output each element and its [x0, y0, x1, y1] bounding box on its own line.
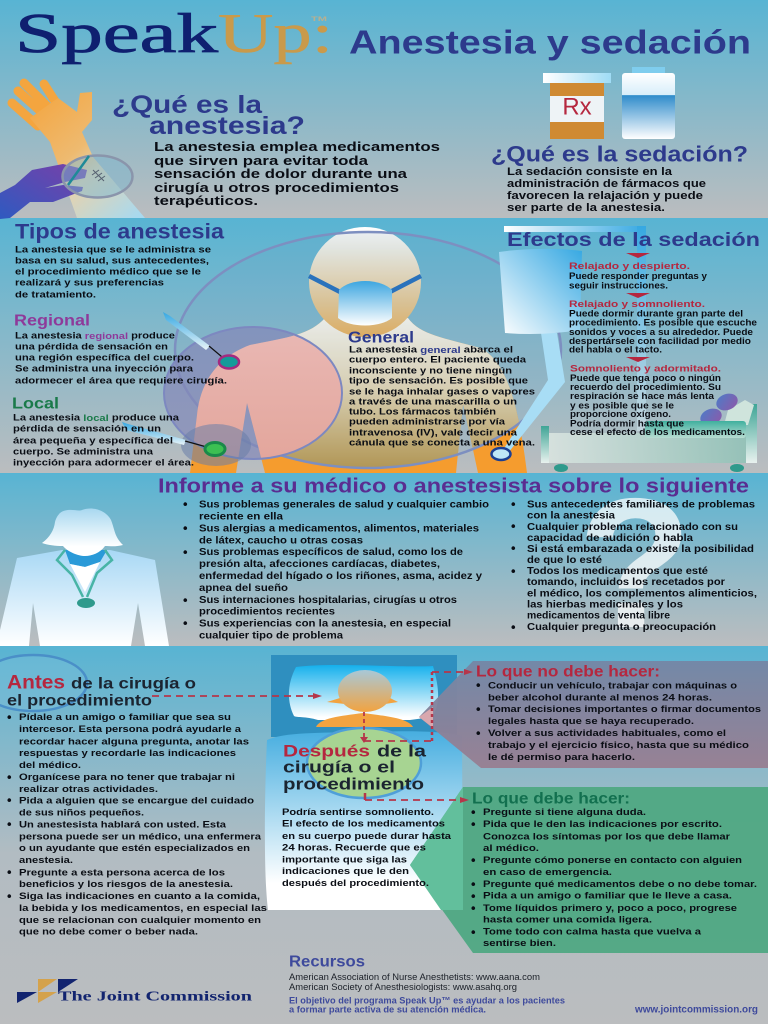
heading: after: de la	[377, 742, 427, 760]
heading: tell your doctor: Informe a su médico o anestesista sobre lo siguiente	[158, 474, 749, 498]
list: what not to do: trabajo y el ejercicio físico, hasta que su médico	[488, 740, 749, 751]
icon: question mark: ?	[578, 461, 692, 667]
heading: effects: Efectos de la sedación	[507, 229, 760, 251]
list: before: Pregunte a esta persona acerca de los	[19, 868, 225, 878]
list: what to do: •	[471, 900, 476, 916]
logo: The Joint Commission: The Joint Commission	[58, 990, 252, 1004]
list: what not to do: •	[476, 726, 481, 740]
list: right column	[511, 496, 757, 634]
list: what to do: Pida que le den las indicaciones por escrito.	[483, 819, 722, 830]
list: before: persona puede ser un médico, una enfermera	[19, 832, 262, 842]
list: what to do: sentirse bien.	[483, 938, 556, 949]
text: sleepy and drowsy	[570, 364, 745, 437]
list: what not to do: beber alcohol durante al menos 24 horas.	[488, 692, 712, 704]
list: what not to do: •	[476, 678, 481, 692]
heading: what to do: Lo que debe hacer:	[472, 790, 630, 808]
arrows: dashed connectors	[152, 669, 473, 803]
text: regional: una pérdida de sensación en	[15, 342, 168, 352]
text: program goal	[289, 996, 565, 1016]
website: www.jointcommission.org	[634, 1004, 758, 1016]
panel: types of anesthesia	[12, 220, 535, 468]
text: after: 24 horas. Recuerde que es	[282, 842, 426, 854]
list: left column: Sus problemas específicos de salud, como los de	[199, 547, 463, 558]
heading: types: Tipos de anestesia	[15, 220, 224, 244]
panel: what not to do	[419, 661, 768, 768]
list: right column: de que lo esté	[527, 555, 602, 566]
text: regional: Se administra una inyección para	[15, 364, 194, 374]
list: what not to do: Conducir un vehículo, trabajar con máquinas o	[488, 680, 737, 692]
list: before: realizar otras actividades.	[19, 784, 158, 795]
text: relaxed and sleepy: Puede dormir durante gran parte del	[569, 308, 743, 318]
list: what to do: •	[471, 924, 476, 940]
list: before	[7, 710, 267, 938]
list: left column: procedimientos recientes	[199, 606, 335, 618]
text: regional: adormecer el área que requiere cirugía.	[15, 376, 227, 386]
text: relaxed and awake: seguir instrucciones.	[569, 280, 668, 290]
text: anesthesia definition: que sirven para evitar toda	[154, 154, 369, 168]
list: right column: •	[511, 518, 516, 534]
list: before: •	[7, 888, 12, 904]
heading: before	[7, 672, 196, 710]
list: before: la bebida y los medicamentos, en especial las	[19, 903, 267, 914]
list: before: •	[7, 864, 12, 880]
list: right column: tomando, incluidos los recetados por	[527, 577, 725, 588]
text: general: intravenosa (IV), vale decir una	[349, 428, 518, 438]
text: types intro	[15, 244, 211, 300]
text: anesthesia definition: cirugía u otros procedimientos	[154, 181, 399, 195]
list: right column: •	[511, 496, 516, 512]
text: after	[282, 807, 452, 889]
text: resource links: American Association of Nurse Anesthetists: www.aana.com	[289, 972, 540, 982]
list: right column: Si está embarazada o existe la posibilidad	[527, 544, 754, 555]
text: regional: una región específica del cuerpo.	[15, 352, 194, 364]
text: anesthesia definition	[154, 140, 440, 208]
heading: general: General	[348, 330, 414, 346]
list: what not to do: Volver a sus actividades habituales, como el	[488, 728, 726, 739]
list: what to do: Pregunte cómo ponerse en contacto con alguien	[483, 855, 742, 866]
list: what to do: •	[471, 804, 476, 820]
list: right column: Sus antecedentes familiares de problemas	[527, 500, 755, 510]
text: relaxed and awake: Relajado y despierto.	[569, 261, 690, 271]
list: what not to do: Tomar decisiones importantes o firmar documentos	[488, 704, 761, 715]
heading: after: cirugía o el	[283, 758, 395, 776]
title	[15, 3, 751, 65]
text: after: después del procedimiento.	[282, 878, 429, 889]
logo: The Joint Commission	[17, 979, 252, 1004]
text: sedation definition: administración de fármacos que	[507, 178, 706, 190]
list: what to do: Conozca los síntomas por los que debe llamar	[483, 832, 730, 842]
text: after: importante que siga las	[282, 854, 407, 866]
heading: what is anesthesia	[112, 91, 305, 140]
list: what not to do: •	[476, 702, 481, 716]
panel: what to do	[410, 787, 768, 953]
text: sedation definition: favorecen la relajación y puede	[507, 190, 703, 202]
list: what to do: al médico.	[483, 843, 539, 854]
title: Anestesia y sedación	[349, 24, 751, 60]
text: sedation definition: La sedación consiste en la	[507, 166, 673, 178]
text: general: La anestesia general abarca el	[349, 344, 513, 356]
text: general: a través de una mascarilla o un	[349, 396, 517, 408]
list: left column: reciente en ella	[199, 512, 284, 522]
text: local	[13, 412, 194, 468]
list: before: Organícese para no tener que trabajar ni	[19, 772, 235, 783]
text: sleepy and drowsy: proporcione oxígeno.	[570, 409, 671, 419]
heading: before: de la cirugía o	[71, 676, 196, 692]
list: left column: presión alta, afecciones cardíacas, diabetes,	[199, 559, 440, 570]
panel: after the procedure illustration	[265, 655, 463, 910]
list: right column: Cualquier problema relacionado con su	[527, 522, 738, 533]
list: before: Siga las indicaciones en cuanto a la comida,	[19, 891, 260, 902]
text: types intro: realizará y sus preferencias	[15, 278, 164, 288]
text: relaxed and awake: Puede responder preguntas y	[569, 271, 707, 281]
heading: after: procedimiento	[283, 774, 424, 794]
list: right column: Todos los medicamentos que esté	[527, 566, 708, 577]
text: local: pérdida de sensación en un	[13, 424, 161, 434]
text: resource links	[289, 972, 540, 992]
text: general: tipo de sensación. Es posible que	[349, 376, 528, 386]
heading: after	[283, 742, 427, 794]
text: local: inyección para adormecer el área.	[13, 458, 194, 468]
list: before: respuestas y recordarle las indicaciones	[19, 748, 236, 759]
list: right column: Cualquier pregunta o preocupación	[527, 622, 716, 633]
list: before: •	[7, 816, 12, 832]
text: anesthesia definition: terapéuticos.	[154, 194, 258, 208]
list: right column: •	[511, 620, 516, 634]
heading: what is anesthesia: ¿Qué es la	[112, 91, 263, 119]
list: what to do: en caso de emergencia.	[483, 867, 612, 878]
decorative ellipse behind before heading	[0, 655, 87, 711]
illustration: hospital bed	[541, 391, 757, 472]
list: what to do: •	[471, 876, 476, 892]
text: general: cánula que se conecta a una vena.	[349, 438, 535, 448]
text: sedation definition: ser parte de la anestesia.	[507, 202, 665, 214]
title: TM	[311, 17, 327, 23]
list: left column: •	[183, 544, 188, 560]
text: types intro: el procedimiento médico que se le	[15, 266, 201, 278]
text: anesthesia definition: La anestesia emplea medicamentos	[154, 140, 440, 154]
list: right column: capacidad de audición o habla	[527, 533, 693, 544]
list: right column: el médico, los complementos alimenticios,	[527, 588, 757, 600]
arrows: sedation levels	[626, 253, 650, 362]
text: general: cuerpo entero. El paciente queda	[349, 354, 527, 366]
text: sleepy and drowsy: recuerdo del procedimiento. Su	[570, 382, 721, 392]
text: general: inconsciente y no tiene ningún	[349, 366, 512, 376]
text: local: área pequeña y específica del	[13, 436, 173, 446]
illustration: IV stand and bag	[492, 226, 646, 460]
list: left column	[183, 496, 489, 642]
resources	[289, 954, 565, 1016]
text: regional	[15, 330, 227, 386]
list: before: del médico.	[19, 760, 81, 771]
text: regional: La anestesia regional produce	[15, 330, 175, 342]
text: general: se le haga inhalar gases o vapores	[349, 386, 535, 398]
list: before: •	[7, 770, 12, 784]
heading: resources: Recursos	[289, 954, 365, 970]
text: types intro: de tratamiento.	[15, 290, 96, 300]
list: left column: Sus internaciones hospitalarias, cirugías u otros	[199, 595, 457, 606]
list: before: que se relacionan con cualquier momento en	[19, 915, 261, 926]
heading: before: Antes	[7, 672, 65, 694]
text: relaxed and sleepy: sonidos y voces a su alrededor. Puede	[569, 327, 753, 337]
list: before: de sus niños pequeños.	[19, 808, 144, 818]
text: relaxed and sleepy	[569, 299, 757, 354]
list: what to do: Tome todo con calma hasta que vuelva a	[483, 926, 702, 938]
list: left column: de látex, caucho u otras cosas	[199, 536, 363, 546]
text: sleepy and drowsy: Podría dormir hasta que	[570, 418, 684, 428]
list: right column: con la anestesia	[527, 510, 615, 522]
title: Speak	[15, 3, 218, 65]
text: relaxed and awake	[569, 261, 707, 290]
text: general: pueden administrarse por vía	[349, 416, 506, 428]
text: local: La anestesia local produce una	[13, 412, 180, 424]
text: after: El efecto de los medicamentos	[282, 818, 445, 830]
text: sleepy and drowsy: y es posible que se le	[570, 400, 674, 410]
text: local: cuerpo. Se administra una	[13, 446, 154, 458]
panel: after the procedure text	[282, 742, 452, 889]
list: before: Pida a alguien que se encargue del cuidado	[19, 796, 254, 806]
panel: tell your doctor	[158, 474, 757, 642]
list: what to do	[471, 804, 757, 949]
list: left column: •	[183, 592, 188, 608]
heading: before: el procedimiento	[7, 692, 152, 710]
list: what to do: hasta comer una comida ligera.	[483, 914, 652, 926]
list: before: Un anestesista hablará con usted. Esta	[19, 820, 227, 830]
illustration: doctor	[0, 508, 169, 646]
list: left column: apnea del sueño	[199, 583, 288, 594]
list: what to do: Pida a un amigo o familiar que le lleve a casa.	[483, 890, 732, 902]
list: what not to do	[476, 678, 761, 763]
text: sleepy and drowsy: cese el efecto de los medicamentos.	[570, 427, 745, 437]
list: before: anestesia.	[19, 855, 73, 866]
text: sedation definition	[507, 166, 706, 214]
list: before: •	[7, 792, 12, 808]
list: left column: Sus problemas generales de salud y cualquier cambio	[199, 500, 489, 510]
list: left column: Sus experiencias con la anestesia, en especial	[199, 618, 451, 630]
heading: local: Local	[12, 396, 59, 412]
text: relaxed and sleepy: procedimiento. Es posible que escuche	[569, 318, 757, 328]
heading: what not to do: Lo que no debe hacer:	[476, 664, 660, 680]
list: right column: •	[511, 540, 516, 556]
list: before: recordar hacer alguna pregunta, anotar las	[19, 736, 249, 748]
text: types intro: basa en su salud, sus antecedentes,	[15, 256, 209, 266]
text: sleepy and drowsy: respiración se hace más lenta	[570, 391, 715, 401]
list: left column: cualquier tipo de problema	[199, 630, 343, 642]
heading: after: Después	[283, 742, 370, 760]
list: before: o un ayudante que estén especializados en	[19, 843, 250, 854]
list: before: beneficios y los riesgos de la anestesia.	[19, 879, 233, 890]
text: types intro: La anestesia que se le administra se	[15, 244, 211, 256]
text: after: en su cuerpo puede durar hasta	[282, 831, 452, 842]
text: general: tubo. Los fármacos también	[349, 406, 496, 418]
text: relaxed and sleepy: despertársele con facilidad por medio	[569, 336, 752, 346]
list: what not to do: legales hasta que se haya recuperado.	[488, 716, 694, 727]
list: what to do: Pregunte si tiene alguna duda.	[483, 807, 646, 818]
list: left column: •	[183, 520, 188, 536]
text: general	[349, 344, 535, 448]
text: anesthesia definition: sensación de dolor durante una	[154, 167, 408, 181]
title: Up:	[218, 3, 333, 65]
list: right column: •	[511, 564, 516, 578]
list: what to do: Pregunte qué medicamentos debe o no debe tomar.	[483, 879, 757, 890]
list: left column: enfermedad del hígado o los riñones, asma, acidez y	[199, 571, 482, 582]
list: left column: •	[183, 616, 188, 630]
list: left column: •	[183, 496, 188, 512]
heading: regional: Regional	[14, 312, 90, 330]
list: right column: medicamentos de venta libre	[527, 610, 670, 622]
text: after: Podría sentirse somnoliento.	[282, 807, 434, 818]
list: before: que no debe comer o beber nada.	[19, 926, 198, 938]
panel: effects of sedation	[507, 229, 760, 437]
list: what not to do: le dé permiso para hacerlo.	[488, 752, 635, 763]
text: resource links: American Society of Anesthesiologists: www.asahq.org	[289, 982, 517, 992]
list: left column: Sus alergias a medicamentos, alimentos, materiales	[199, 524, 479, 534]
text: program goal: El objetivo del programa Speak Up™ es ayudar a los pacientes	[289, 996, 565, 1006]
list: what to do: •	[471, 888, 476, 904]
list: what to do: •	[471, 816, 476, 832]
list: right column: las hierbas medicinales y los	[527, 600, 683, 610]
text: after: indicaciones que le den	[282, 866, 409, 877]
text: relaxed and sleepy: del habla o el tacto.	[569, 344, 662, 354]
text: program goal: a formar parte activa de su atención médica.	[289, 1004, 486, 1016]
list: before: •	[7, 710, 12, 724]
heading: what is anesthesia: anestesia?	[149, 112, 305, 140]
text: sleepy and drowsy: Somnoliento y adormitado.	[570, 364, 721, 374]
icon: hand and arm with syringe	[0, 83, 145, 219]
illustration: patient with anesthesia zones	[122, 227, 570, 475]
icon: prescription bottles: Rx	[562, 94, 592, 120]
icon: prescription bottles	[543, 67, 675, 139]
heading: what is sedation: ¿Qué es la sedación?	[491, 142, 748, 166]
text: relaxed and sleepy: Relajado y somnoliento.	[569, 299, 705, 309]
text: sleepy and drowsy: Puede que tenga poco o ningún	[570, 373, 721, 383]
list: what to do: Tome líquidos primero y, poco a poco, progrese	[483, 903, 737, 914]
panel: before the procedure	[7, 672, 267, 938]
list: before: Pídale a un amigo o familiar que sea su	[19, 712, 231, 723]
list: before: intercesor. Esta persona podrá ayudarle a	[19, 724, 242, 735]
list: what to do: •	[471, 852, 476, 868]
